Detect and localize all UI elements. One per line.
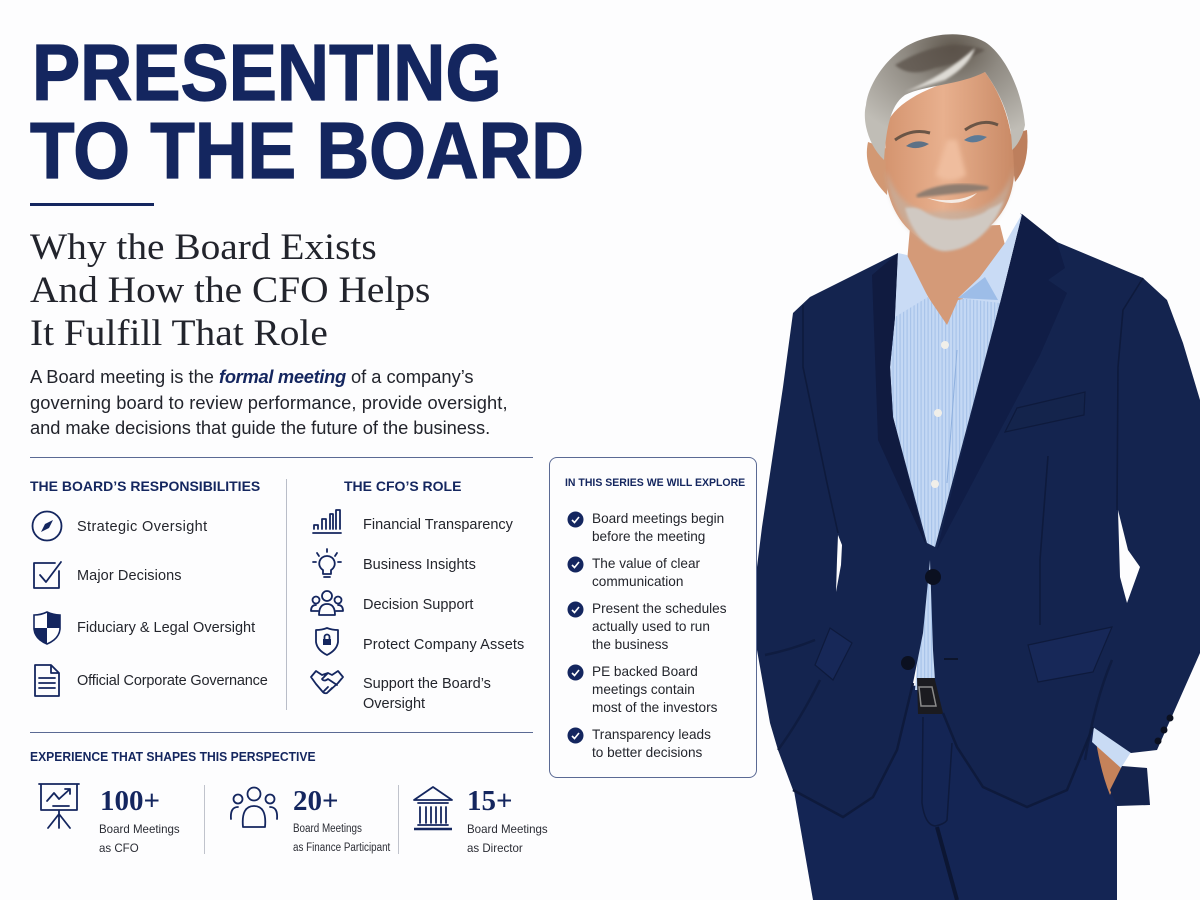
panel: experience — [30, 749, 548, 855]
caption: Board Meetings — [99, 822, 180, 836]
heading: THE BOARD’S RESPONSIBILITIES — [30, 478, 260, 494]
subtitle — [30, 227, 430, 354]
caption: Board Meetings — [293, 823, 362, 835]
icon: shield — [33, 611, 61, 645]
text: Transparency leads — [592, 727, 711, 742]
hem shadow — [793, 683, 1093, 817]
eyes — [906, 141, 929, 148]
text — [592, 726, 711, 762]
heading: THE CFO’S ROLE — [344, 478, 461, 494]
item: fiduciary: Fiduciary & Legal Oversight — [77, 620, 255, 636]
icon: people — [310, 590, 344, 616]
bullet 1 — [568, 511, 724, 544]
text — [592, 556, 700, 589]
panel: CFO role — [310, 478, 524, 712]
text: the business — [592, 637, 668, 652]
subtitle: It Fulfill That Role — [30, 313, 328, 354]
rule — [30, 457, 533, 458]
icon: lock shield — [315, 627, 339, 656]
stat: 15+ — [467, 785, 548, 855]
beard — [905, 200, 1004, 251]
check icon — [568, 664, 584, 680]
check icon — [568, 602, 584, 618]
item: major decisions: Major Decisions — [77, 568, 182, 584]
seams — [803, 278, 1143, 625]
caption: as Finance Participant — [293, 842, 390, 854]
item: support oversight: Oversight — [363, 696, 425, 712]
caption: Board Meetings — [467, 822, 548, 836]
icon: bank — [413, 786, 453, 830]
eyebrows — [895, 122, 998, 140]
caption — [293, 823, 390, 854]
arm-body gaps — [836, 510, 1140, 603]
caption — [99, 822, 180, 855]
check icon — [568, 556, 584, 572]
heading: IN THIS SERIES WE WILL EXPLORE — [565, 477, 745, 489]
intro paragraph: governing board to review performance, provide oversight, — [30, 392, 508, 413]
moustache — [917, 185, 988, 196]
title: PRESENTING — [32, 28, 502, 117]
pockets — [1005, 392, 1085, 432]
panel: board responsibilities — [30, 478, 268, 697]
icon: handshake — [310, 670, 344, 694]
bullet 3 — [568, 601, 727, 652]
number: 15+ — [467, 785, 513, 817]
jacket buttons — [925, 569, 941, 585]
neck — [907, 225, 1005, 328]
divider — [204, 785, 205, 854]
title underline — [30, 203, 154, 206]
subtitle: Why the Board Exists — [30, 227, 377, 268]
text: The value of clear — [592, 556, 700, 571]
icon: presentation board — [38, 783, 80, 829]
intro paragraph: A Board meeting is the formal meeting of a company’s — [30, 366, 474, 387]
number: 100+ — [100, 785, 160, 817]
jacket — [755, 213, 1200, 817]
face — [885, 72, 1014, 250]
ears — [867, 142, 890, 195]
hand in pocket — [1095, 735, 1122, 795]
item: support oversight: Support the Board’s — [363, 676, 491, 692]
item: protect assets: Protect Company Assets — [363, 637, 524, 653]
smile — [927, 193, 977, 203]
caption: as Director — [467, 841, 523, 855]
text: communication — [592, 574, 683, 589]
text — [592, 511, 724, 544]
stat: 100+ — [99, 785, 180, 855]
text — [592, 601, 727, 652]
check icon — [568, 728, 584, 744]
rule — [30, 732, 533, 733]
caption: as CFO — [99, 841, 139, 855]
item: governance: Official Corporate Governance — [77, 673, 268, 689]
icon: document — [34, 664, 60, 697]
subtitle: And How the CFO Helps — [30, 270, 430, 311]
check icon — [568, 512, 584, 528]
cuff — [1092, 726, 1131, 768]
text: most of the investors — [592, 700, 717, 715]
hair — [865, 34, 1025, 160]
collar — [895, 253, 928, 317]
icon: light bulb — [312, 548, 342, 578]
icon: checkbox — [33, 561, 62, 589]
item: decision support: Decision Support — [363, 597, 473, 613]
side stubble — [886, 165, 1014, 250]
number: 20+ — [293, 785, 339, 817]
caption — [467, 822, 548, 855]
icon: group — [230, 786, 278, 828]
intro paragraph — [30, 366, 508, 438]
belt — [917, 678, 944, 714]
item: support oversight — [363, 676, 491, 712]
text: before the meeting — [592, 529, 705, 544]
icon: compass — [32, 510, 62, 542]
panel: series list — [549, 457, 757, 778]
portrait of the presenter — [757, 34, 1200, 900]
text: PE backed Board — [592, 664, 698, 679]
nose — [936, 140, 966, 180]
heading: EXPERIENCE THAT SHAPES THIS PERSPECTIVE — [30, 749, 316, 764]
bullet 5 — [568, 727, 711, 760]
item: business insights: Business Insights — [363, 557, 476, 573]
trousers — [793, 680, 1117, 900]
text: to better decisions — [592, 745, 702, 760]
back jacket tail — [1110, 766, 1150, 806]
stat: 20+ — [293, 785, 390, 854]
shirt buttons and placket — [931, 341, 949, 488]
text: actually used to run — [592, 619, 710, 634]
divider — [286, 479, 287, 710]
bullet 2 — [568, 556, 700, 589]
title — [30, 28, 584, 195]
item: strategic oversight: Strategic Oversight — [77, 519, 208, 535]
bullet 4 — [568, 664, 717, 715]
text: meetings contain — [592, 682, 695, 697]
item: financial transparency: Financial Transparency — [363, 517, 513, 533]
icon: bar chart — [312, 509, 342, 534]
shirt — [890, 290, 1005, 690]
folds — [765, 640, 1112, 760]
text: Board meetings begin — [592, 511, 724, 526]
title: TO THE BOARD — [30, 106, 584, 195]
intro paragraph: and make decisions that guide the future of the business. — [30, 417, 490, 438]
lapels — [937, 214, 1067, 550]
text — [592, 664, 717, 715]
text: Present the schedules — [592, 601, 727, 616]
